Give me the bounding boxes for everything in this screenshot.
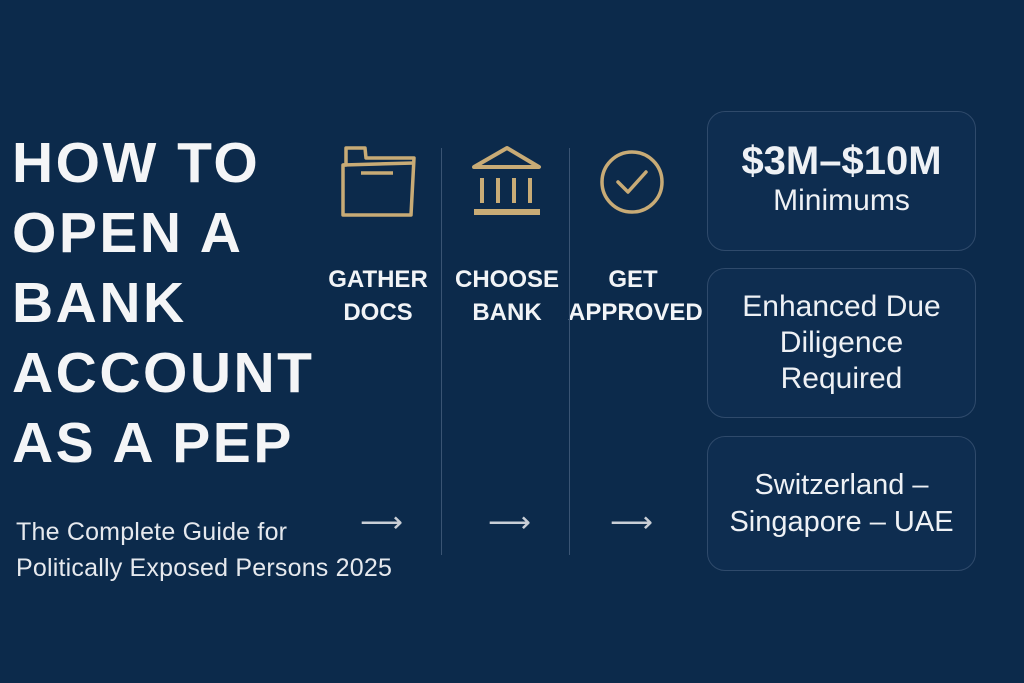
card: due diligence: Enhanced Due bbox=[742, 290, 941, 323]
card: minimums: Minimums bbox=[773, 184, 910, 217]
step label: gather docs: DOCS bbox=[343, 299, 413, 326]
card: due diligence: Required bbox=[781, 362, 902, 395]
step label: get approved bbox=[568, 266, 703, 326]
step label: gather docs: GATHER bbox=[328, 266, 428, 293]
card: due diligence: Diligence bbox=[780, 326, 903, 359]
card: minimums bbox=[707, 111, 976, 251]
arrow 2: ⟶ bbox=[488, 506, 531, 539]
subtitle: The Complete Guide for bbox=[16, 518, 287, 546]
icon: check circle bbox=[600, 150, 664, 214]
icon: bank bbox=[472, 146, 542, 215]
title: HOW TO bbox=[12, 131, 260, 195]
card: minimums: $3M–$10M bbox=[741, 139, 942, 183]
arrow 3: ⟶ bbox=[610, 506, 653, 539]
step label: choose bank bbox=[455, 266, 559, 326]
subtitle bbox=[16, 518, 392, 582]
card: due diligence bbox=[707, 268, 976, 418]
card: jurisdictions: Switzerland – bbox=[754, 468, 929, 500]
icon: folder bbox=[341, 146, 416, 217]
step label: choose bank: CHOOSE bbox=[455, 266, 559, 293]
title: BANK bbox=[12, 271, 187, 335]
step label: get approved: APPROVED bbox=[568, 299, 703, 326]
step label: get approved: GET bbox=[608, 266, 658, 293]
card: jurisdictions: Singapore – UAE bbox=[729, 506, 954, 538]
subtitle: Politically Exposed Persons 2025 bbox=[16, 554, 392, 582]
step label: gather docs bbox=[328, 266, 428, 326]
title: AS A PEP bbox=[12, 411, 294, 475]
card: jurisdictions bbox=[707, 436, 976, 571]
title: OPEN A bbox=[12, 201, 243, 265]
title bbox=[12, 131, 314, 475]
step label: choose bank: BANK bbox=[472, 299, 542, 326]
arrow 1: ⟶ bbox=[360, 506, 403, 539]
title: ACCOUNT bbox=[12, 341, 314, 405]
